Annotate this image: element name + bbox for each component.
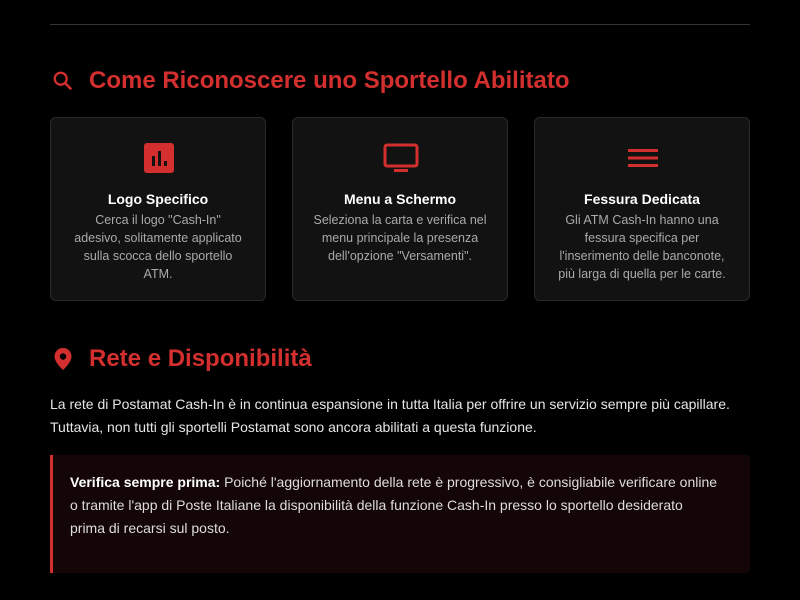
card: menu: dell'opzione "Versamenti". xyxy=(328,249,472,263)
callout: verifica: Verifica sempre prima: Poiché l'aggiornamento della rete è progressivo, è consigliabile verificare online xyxy=(70,474,717,490)
card: logo xyxy=(50,117,266,301)
icon: screen xyxy=(384,144,418,172)
icon: chart logo xyxy=(144,143,174,173)
card: menu xyxy=(292,117,508,301)
card: fessura: Fessura Dedicata xyxy=(584,191,700,207)
heading: rete: Rete e Disponibilità xyxy=(89,345,312,372)
card: logo: Cerca il logo "Cash-In" xyxy=(95,213,221,227)
icon: slot lines xyxy=(628,149,658,167)
card: fessura xyxy=(534,117,750,301)
icon: search xyxy=(54,72,72,90)
card: logo: ATM. xyxy=(144,267,172,281)
heading: come riconoscere: Come Riconoscere uno Sportello Abilitato xyxy=(89,67,570,94)
card: menu: Seleziona la carta e verifica nel xyxy=(313,213,486,227)
callout: verifica: prima di recarsi sul posto. xyxy=(70,520,230,536)
card: menu: menu principale la presenza xyxy=(322,231,478,245)
callout: verifica: o tramite l'app di Poste Italiane la disponibilità della funzione Cash-In presso lo sportello desiderato xyxy=(70,497,683,513)
card: fessura: l'inserimento delle banconote, xyxy=(560,249,724,263)
card: logo: Logo Specifico xyxy=(108,191,208,207)
card: fessura: fessura specifica per xyxy=(585,231,699,245)
card: menu: Menu a Schermo xyxy=(344,191,456,207)
card: fessura: Gli ATM Cash-In hanno una xyxy=(565,213,719,227)
card: fessura: più larga di quella per le carte. xyxy=(558,267,726,281)
icon: location pin xyxy=(54,348,72,370)
card: logo: adesivo, solitamente applicato xyxy=(74,231,242,245)
card: logo: sulla scocca dello sportello xyxy=(84,249,232,263)
callout: verifica xyxy=(50,455,750,573)
paragraph: La rete di Postamat Cash-In è in continua espansione in tutta Italia per offrire un servizio sempre più capillare. Tuttavia, non tutti gli sportelli Postamat sono ancora abilitati a questa funzione. xyxy=(50,396,730,435)
